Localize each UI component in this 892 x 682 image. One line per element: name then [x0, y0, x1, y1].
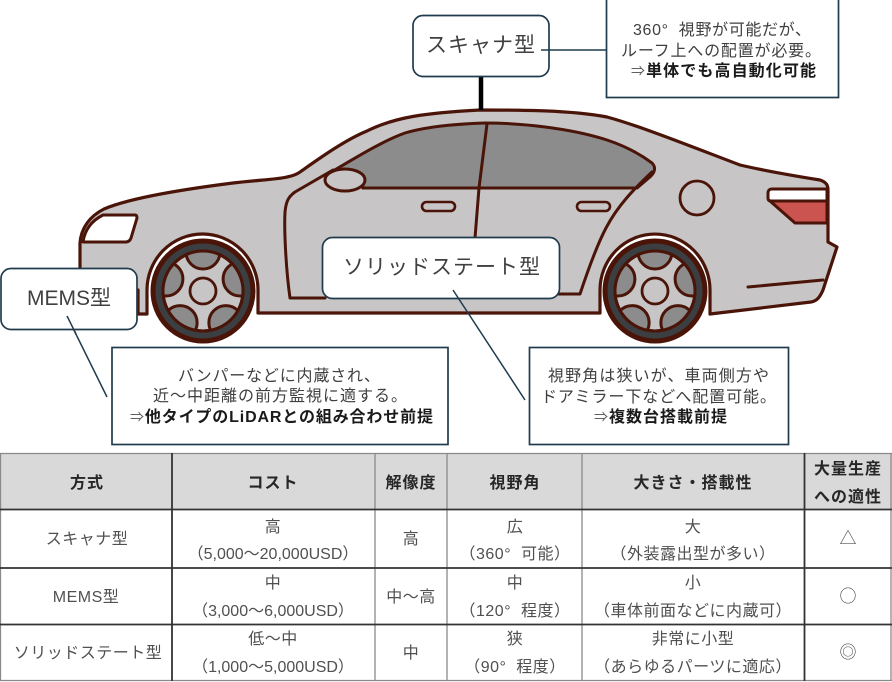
callout: solid state description: 視野角は狭いが、車両側方や	[548, 367, 769, 385]
table header row: への適性	[814, 487, 882, 506]
table grid	[0, 453, 892, 681]
table row: MEMS: （車体前面などに内蔵可）	[594, 602, 792, 620]
label: MEMS type	[1, 268, 137, 334]
table header row: 解像度	[385, 473, 437, 492]
rear bumper line	[748, 280, 823, 287]
label: MEMS type: MEMS型	[27, 287, 111, 310]
callout: MEMS description	[112, 348, 448, 444]
table row: scanner: △	[840, 524, 856, 549]
callout: scanner description: 360° 視野が可能だが、	[633, 21, 811, 39]
table header row: 視野角	[489, 473, 541, 492]
callout: scanner description	[606, 0, 838, 98]
door outlines	[285, 124, 652, 298]
callout: MEMS description: 近～中距離の前方監視に適する。	[153, 387, 407, 405]
arrow: roof mount stem	[479, 76, 483, 110]
table row: solid state: ◎	[840, 638, 856, 663]
table row: solid state: 中	[403, 644, 419, 662]
table row: solid state: （90° 程度）	[464, 658, 566, 676]
connector: solid state label to description	[453, 290, 525, 400]
rear door handle	[577, 202, 610, 211]
callout: solid state description	[530, 348, 788, 444]
label: solid state type: ソリッドステート型	[343, 256, 541, 279]
front door handle	[422, 202, 455, 211]
table row: solid state: ソリッドステート型	[14, 644, 162, 662]
table row: MEMS: ○	[840, 582, 856, 607]
table header row: コスト	[247, 475, 299, 492]
table row: scanner: （外装露出型が多い）	[610, 545, 776, 563]
rear wheel	[601, 235, 709, 341]
label: solid state type	[322, 238, 560, 298]
table row: MEMS: 中～高	[386, 588, 436, 606]
table row: scanner: 高	[265, 518, 281, 536]
illustration: car side view	[80, 110, 837, 341]
table header row	[0, 453, 892, 509]
table row: MEMS: （120° 程度）	[460, 602, 570, 620]
tail light	[768, 189, 827, 223]
label: scanner type	[413, 16, 549, 76]
table row: MEMS: MEMS型	[53, 588, 119, 606]
table row: MEMS: （3,000～6,000USD）	[192, 602, 354, 620]
callout: solid state description: ドアミラー下などへ配置可能。	[541, 388, 776, 406]
fuel cap	[680, 181, 714, 215]
table row: MEMS: 中	[507, 574, 523, 592]
table row: MEMS	[53, 574, 856, 620]
side mirror	[325, 169, 365, 191]
connector: MEMS label to description	[67, 316, 107, 397]
table row: scanner	[46, 518, 856, 563]
table row: scanner: （360° 可能）	[460, 545, 570, 563]
table row: scanner: スキャナ型	[46, 530, 128, 548]
front wheel	[149, 235, 257, 341]
callout: MEMS description: バンパーなどに内蔵され、	[178, 367, 380, 385]
table row: solid state	[14, 630, 856, 676]
callout: scanner description: ⇒単体でも高自動化可能	[631, 61, 816, 81]
table row: scanner: （5,000～20,000USD）	[188, 545, 358, 563]
table header row: 方式	[70, 473, 104, 492]
windows	[333, 123, 655, 188]
table row: MEMS: 小	[685, 574, 701, 592]
table row: solid state: 非常に小型	[652, 630, 734, 648]
table row: MEMS: 中	[265, 574, 281, 592]
table row: solid state: 狭	[507, 630, 523, 648]
table row: solid state: （あらゆるパーツに適応）	[594, 658, 792, 676]
table header row: 大量生産	[814, 460, 882, 478]
comparison table	[0, 453, 892, 681]
callout: scanner description: ルーフ上への配置が必要。	[621, 42, 821, 60]
callout: MEMS description: ⇒他タイプのLiDARとの組み合わせ前提	[130, 407, 433, 427]
table row: solid state: （1,000～5,000USD）	[192, 658, 354, 676]
table row: scanner: 大	[685, 518, 701, 536]
table row: solid state: 低～中	[248, 630, 298, 648]
table header row: 大きさ・搭載性	[633, 473, 753, 492]
connector: scanner label to description	[541, 49, 606, 51]
table row: scanner: 広	[507, 518, 523, 536]
callout: solid state description: ⇒複数台搭載前提	[594, 407, 727, 427]
car body	[80, 110, 837, 314]
label: scanner type: スキャナ型	[426, 34, 536, 57]
headlight	[83, 215, 137, 242]
table row: scanner: 高	[403, 530, 419, 548]
